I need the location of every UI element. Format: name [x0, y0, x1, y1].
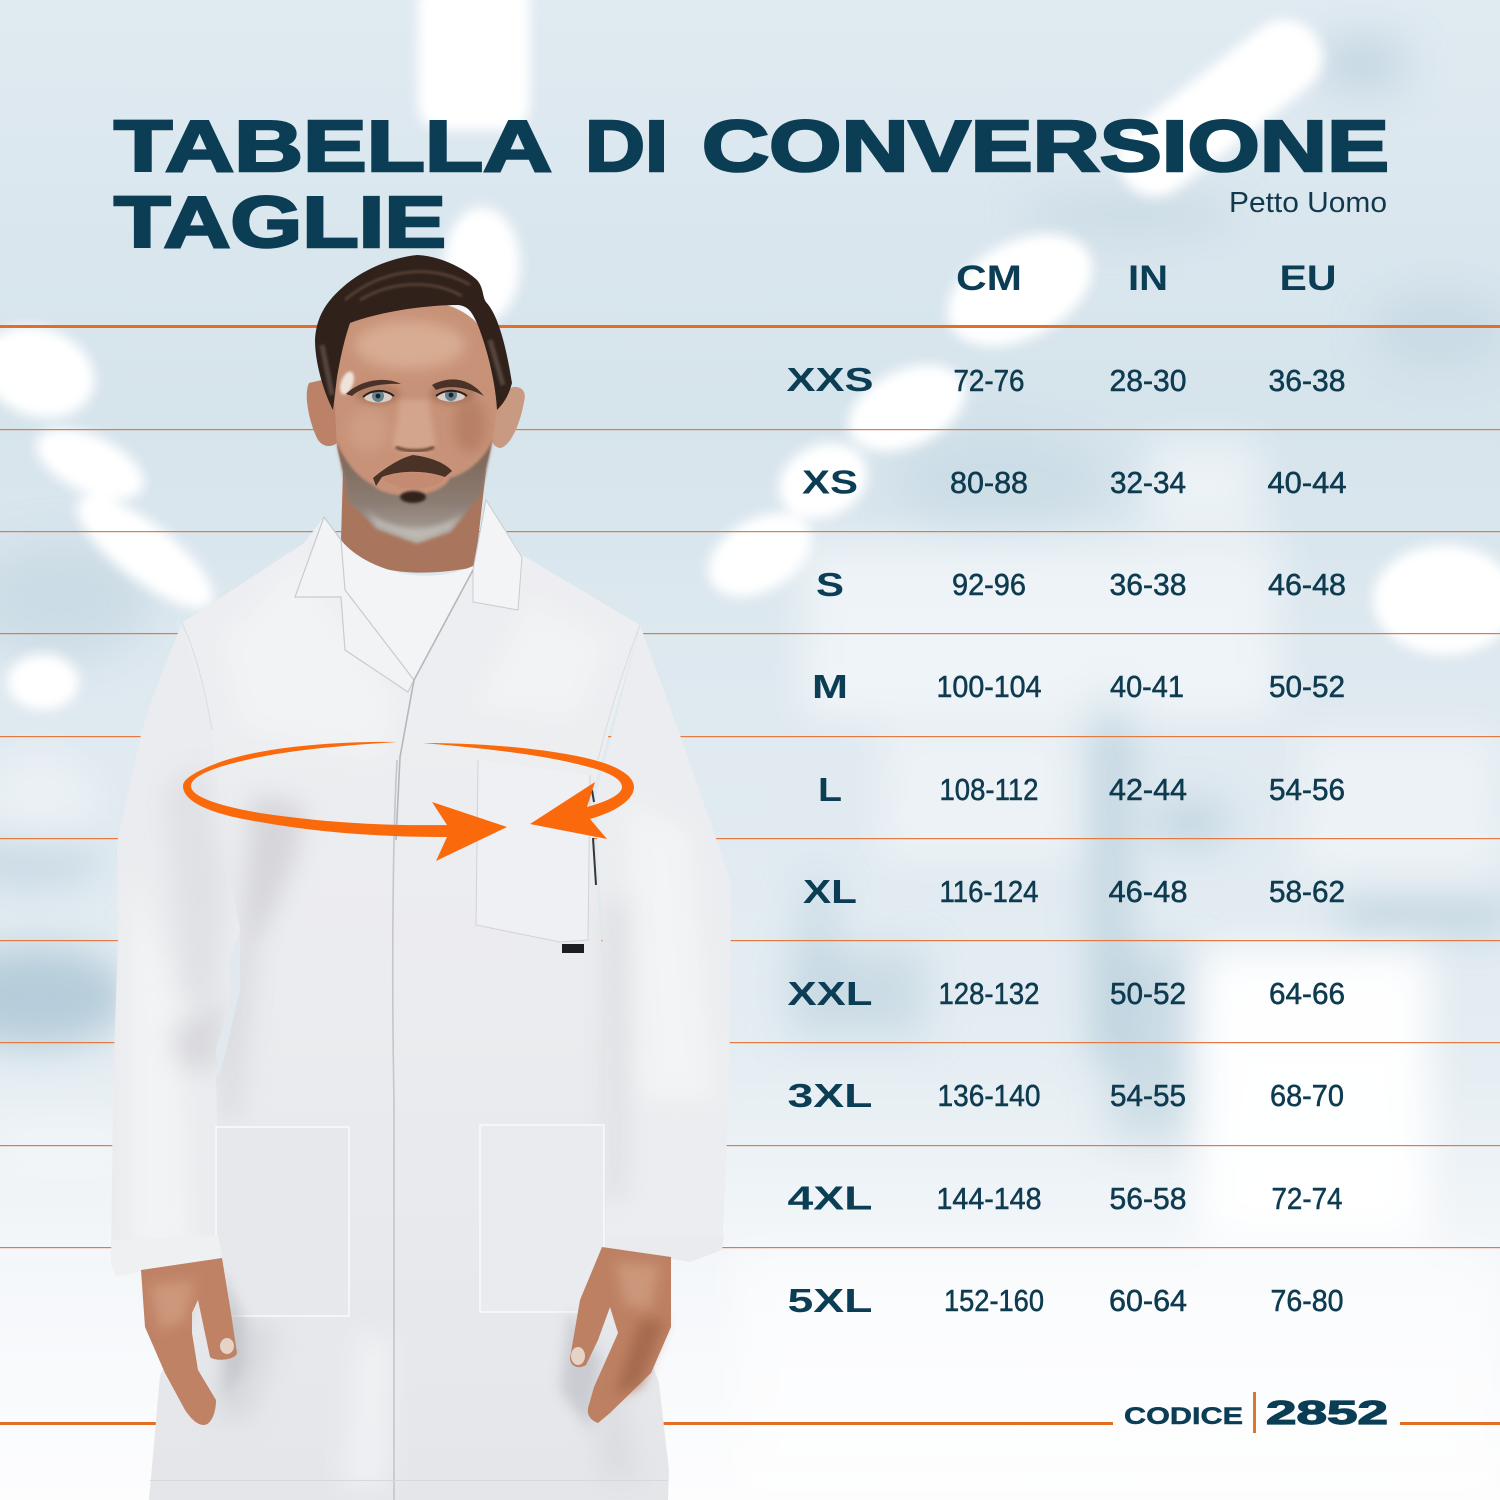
EU column values: 68-70: [1270, 1078, 1344, 1113]
EU column values: 46-48: [1268, 567, 1346, 602]
white bokeh shapes: [0, 0, 1500, 710]
neck: [341, 470, 486, 573]
eye sockets: [355, 383, 401, 405]
title: [114, 107, 1389, 263]
right cuff: [606, 1235, 724, 1262]
coat shading: [215, 560, 640, 1490]
size labels: [786, 361, 874, 1319]
CM column values: 128-132: [938, 976, 1040, 1011]
IN column values: 54-55: [1110, 1078, 1186, 1113]
EU column values: 76-80: [1270, 1283, 1344, 1318]
EU column values: 50-52: [1269, 669, 1345, 704]
IN column values: 50-52: [1110, 976, 1186, 1011]
CM column values: 144-148: [936, 1181, 1042, 1216]
EU column values: 36-38: [1268, 363, 1346, 398]
size labels: 3XL: [788, 1077, 872, 1114]
hair: [315, 255, 512, 410]
CM column values: 116-124: [940, 874, 1038, 909]
IN column values: 36-38: [1110, 567, 1186, 602]
coat body: [149, 500, 669, 1500]
lower left pocket: [216, 1127, 349, 1316]
forehead highlight: [355, 321, 465, 369]
size labels: M: [812, 668, 848, 705]
column headers: [956, 259, 1336, 298]
size labels: XL: [803, 873, 857, 910]
product code: CODICE: [1124, 1403, 1243, 1430]
CM column values: 100-104: [936, 669, 1042, 704]
EU column values: 40-44: [1268, 465, 1346, 500]
IN column values: 60-64: [1109, 1283, 1187, 1318]
ears: [307, 380, 337, 446]
right hand: [560, 1247, 671, 1430]
temple highlight: [337, 370, 357, 396]
coat: [111, 500, 731, 1500]
EU column values: 54-56: [1269, 772, 1345, 807]
left cuff: [111, 1235, 222, 1276]
left lapel: [295, 517, 414, 692]
beard: [336, 438, 493, 543]
eyebrows: [346, 380, 401, 396]
CM column values: 108-112: [940, 772, 1038, 807]
right collar: [473, 500, 522, 610]
size labels: 4XL: [788, 1180, 872, 1216]
upper lids: [363, 391, 467, 397]
product code: [1124, 1392, 1388, 1433]
man in white lab coat: [111, 255, 731, 1500]
left underarm gap: [216, 929, 240, 1078]
size labels: S: [816, 566, 844, 603]
size labels: 5XL: [788, 1282, 872, 1319]
IN column values: 28-30: [1110, 363, 1186, 398]
CM column values: [936, 363, 1044, 1318]
coat right sleeve: [595, 625, 731, 1262]
right coat front edge: [396, 570, 473, 840]
cheeks and nose highlight: [348, 408, 388, 452]
subtitle: Petto Uomo: Petto Uomo: [1229, 187, 1387, 219]
placket seam: [393, 760, 397, 1500]
product code: 2852: [1266, 1394, 1388, 1431]
dark underarm marks: [592, 790, 596, 885]
soul patch: [400, 491, 426, 503]
IN column values: 56-58: [1110, 1181, 1186, 1216]
CM column values: 92-96: [952, 567, 1026, 602]
lips: [382, 473, 445, 488]
left hand: [141, 1258, 245, 1425]
EU column values: [1268, 363, 1346, 1318]
left hand shadow: [222, 1270, 245, 1400]
IN column values: 42-44: [1109, 772, 1187, 807]
left sweep arrow: [183, 742, 507, 861]
CM column values: 136-140: [938, 1078, 1040, 1113]
title: DI: [585, 107, 668, 187]
size labels: XXS: [786, 361, 874, 398]
blue-grey soft shapes: [0, 36, 1500, 1140]
t-shirt: [341, 540, 480, 690]
size labels: L: [818, 771, 842, 808]
hem: [150, 1480, 668, 1481]
face: [335, 302, 497, 541]
title: TABELLA: [114, 107, 552, 187]
CM column values: 72-76: [954, 363, 1024, 398]
CM column values: 80-88: [950, 465, 1028, 500]
nose: [392, 400, 436, 453]
IN column values: [1108, 363, 1188, 1318]
size labels: XS: [802, 464, 858, 500]
head: [307, 255, 525, 543]
mustache: [373, 455, 452, 486]
right sweep arrow: [423, 743, 634, 839]
column headers: EU: [1280, 259, 1336, 298]
coat label: [562, 944, 584, 953]
column headers: IN: [1128, 259, 1168, 298]
IN column values: 46-48: [1108, 874, 1188, 909]
eyes: [364, 392, 392, 402]
IN column values: 32-34: [1110, 465, 1186, 500]
size labels: XXL: [788, 975, 872, 1012]
right hand shadow: [560, 1310, 600, 1430]
IN column values: 40-41: [1110, 669, 1184, 704]
EU column values: 64-66: [1269, 976, 1345, 1011]
large pale glows: [0, 440, 1500, 1500]
sleeve shading: [130, 760, 715, 1250]
coat left sleeve: [111, 623, 240, 1276]
EU column values: 58-62: [1269, 874, 1345, 909]
chest pocket: [476, 760, 590, 942]
title: CONVERSIONE: [702, 107, 1389, 187]
lower right pocket: [480, 1125, 604, 1312]
title: TAGLIE: [114, 183, 446, 263]
orange measuring arrows: [183, 742, 634, 861]
shoulder seam: [182, 623, 640, 760]
EU column values: 72-74: [1272, 1181, 1342, 1216]
column headers: CM: [956, 259, 1022, 298]
CM column values: 152-160: [944, 1283, 1044, 1318]
hair highlights: [345, 272, 470, 300]
horizontal table rules: [0, 325, 1500, 1425]
